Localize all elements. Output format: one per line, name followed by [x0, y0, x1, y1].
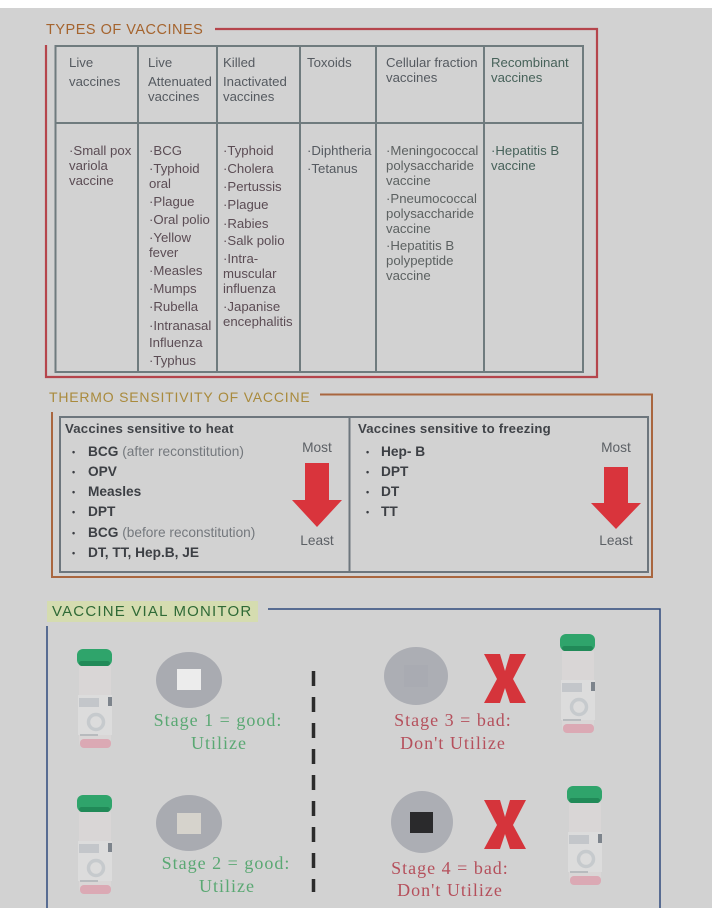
- label: stage 4: Don't Utilize: [397, 880, 503, 900]
- column: live attenuated vaccines: ·Rubella: [149, 299, 199, 314]
- stage 1: [77, 649, 282, 753]
- column: killed inactivated vaccines: ·Plague: [223, 197, 268, 212]
- column: killed inactivated vaccines: Inactivated: [223, 74, 287, 89]
- label: stage 2: [162, 853, 290, 896]
- column: live vaccines: variola: [69, 158, 109, 173]
- column: sensitive to heat: •: [72, 487, 75, 497]
- column: sensitive to heat: •: [72, 467, 75, 477]
- panel: thermo sensitivity table: [60, 417, 648, 572]
- column: killed inactivated vaccines: ·Cholera: [223, 161, 274, 176]
- column: toxoids: ·Diphtheria: [307, 143, 372, 158]
- indicator: stage 1: [156, 652, 222, 708]
- column: toxoids: Toxoids: [307, 55, 352, 70]
- column: sensitive to heat: BCG (after reconstitution): [88, 444, 244, 459]
- column: sensitive to heat: Most: [302, 440, 332, 455]
- label: stage 3: Don't Utilize: [400, 733, 506, 753]
- label: stage 2: Stage 2 = good:: [162, 853, 290, 873]
- column: live attenuated vaccines: ·Measles: [149, 263, 203, 278]
- column: sensitive to heat: DPT: [88, 504, 116, 519]
- column: live attenuated vaccines: ·Intranasal: [149, 318, 211, 333]
- column: live attenuated vaccines: Influenza: [149, 335, 203, 350]
- arrow: freezing most to least: [591, 467, 641, 529]
- column: killed inactivated vaccines: ·Typhoid: [223, 143, 274, 158]
- column: sensitive to freezing: Least: [599, 533, 633, 548]
- column: killed inactivated vaccines: ·Salk polio: [223, 233, 285, 248]
- stage 3: [384, 634, 595, 753]
- column: recombinant vaccines: vaccine: [491, 158, 536, 173]
- column: recombinant vaccines: Recombinant: [491, 55, 569, 70]
- column: live attenuated vaccines: ·Mumps: [149, 281, 197, 296]
- column: live vaccines: vaccines: [69, 74, 121, 89]
- column: sensitive to freezing: DPT: [381, 464, 409, 479]
- column: live vaccines: vaccine: [69, 173, 114, 188]
- column: live attenuated vaccines: ·Plague: [149, 194, 194, 209]
- divider: dashed line: [312, 671, 315, 892]
- column: killed inactivated vaccines: ·Japanise: [223, 299, 280, 314]
- column: sensitive to heat: •: [72, 548, 75, 558]
- heading: types of vaccines: TYPES OF VACCINES: [46, 22, 203, 38]
- stage 2: [77, 795, 290, 896]
- column: sensitive to heat: •: [72, 447, 75, 457]
- column: cellular fraction vaccines: polypeptide: [386, 253, 453, 268]
- column: live vaccines: [69, 55, 132, 188]
- column: sensitive to freezing: TT: [381, 504, 398, 519]
- column: sensitive to freezing: •: [366, 447, 369, 457]
- column: sensitive to heat: DT, TT, Hep.B, JE: [88, 545, 199, 560]
- column: cellular fraction vaccines: [386, 55, 478, 283]
- table grid: [55, 46, 583, 372]
- column: recombinant vaccines: ·Hepatitis B: [491, 143, 559, 158]
- column: live vaccines: ·Small pox: [69, 143, 132, 158]
- column: live attenuated vaccines: Live: [148, 55, 172, 70]
- column: cellular fraction vaccines: vaccine: [386, 268, 431, 283]
- heading: thermo sensitivity of vaccine: THERMO SENSITIVITY OF VACCINE: [49, 389, 310, 405]
- column: killed inactivated vaccines: Killed: [223, 55, 255, 70]
- column: live attenuated vaccines: ·Oral polio: [149, 212, 210, 227]
- indicator: stage 4: [391, 791, 453, 853]
- column: killed inactivated vaccines: ·Pertussis: [223, 179, 282, 194]
- column: killed inactivated vaccines: vaccines: [223, 89, 275, 104]
- panel frame: vaccine vial monitor: [47, 609, 660, 908]
- icon: red X stage 3: [484, 654, 526, 703]
- vial: stage 2: [77, 795, 112, 894]
- label: stage 3: Stage 3 = bad:: [394, 710, 512, 730]
- column: live attenuated vaccines: fever: [149, 245, 179, 260]
- column: sensitive to heat: Vaccines sensitive to heat: [65, 421, 234, 436]
- column: killed inactivated vaccines: influenza: [223, 281, 276, 296]
- table outline: [60, 417, 648, 572]
- column: toxoids: ·Tetanus: [307, 161, 358, 176]
- column: cellular fraction vaccines: vaccine: [386, 221, 431, 236]
- panel frame: thermo sensitivity: [52, 394, 652, 577]
- column: cellular fraction vaccines: polysaccharide: [386, 206, 474, 221]
- column: sensitive to heat: •: [72, 528, 75, 538]
- column: sensitive to freezing: •: [366, 487, 369, 497]
- arrow: heat most to least: [292, 463, 342, 527]
- label: stage 2: Utilize: [199, 876, 255, 896]
- label: stage 1: Stage 1 = good:: [154, 710, 282, 730]
- label: stage 1: [154, 710, 282, 753]
- column: live attenuated vaccines: [148, 55, 212, 368]
- indicator: stage 3: [384, 647, 448, 705]
- column: cellular fraction vaccines: Cellular fraction: [386, 55, 478, 70]
- column: sensitive to heat: •: [72, 507, 75, 517]
- column: sensitive to heat: Measles: [88, 484, 142, 499]
- column: sensitive to freezing: Hep- B: [381, 444, 425, 459]
- column: killed inactivated vaccines: [223, 55, 293, 329]
- column: sensitive to freezing: Vaccines sensitive to freezing: [358, 421, 551, 436]
- vial: stage 3: [560, 634, 595, 733]
- column: sensitive to heat: OPV: [88, 464, 118, 479]
- column: live attenuated vaccines: oral: [149, 176, 171, 191]
- column: recombinant vaccines: [491, 55, 569, 173]
- label: stage 1: Utilize: [191, 733, 247, 753]
- panel frame: types of vaccines: [46, 29, 597, 377]
- column: sensitive to freezing: [358, 421, 633, 548]
- column: cellular fraction vaccines: polysaccharide: [386, 158, 474, 173]
- column: cellular fraction vaccines: vaccine: [386, 173, 431, 188]
- vial: stage 1: [77, 649, 112, 748]
- stage 4: [391, 786, 602, 900]
- column: live attenuated vaccines: ·Yellow: [149, 230, 192, 245]
- column: live attenuated vaccines: Attenuated: [148, 74, 212, 89]
- label: stage 4: [391, 858, 509, 900]
- column: live vaccines: Live: [69, 55, 93, 70]
- column: cellular fraction vaccines: ·Meningococcal: [386, 143, 478, 158]
- column: live attenuated vaccines: vaccines: [148, 89, 200, 104]
- column: sensitive to heat: [65, 421, 334, 560]
- label: stage 4: Stage 4 = bad:: [391, 858, 509, 878]
- column: toxoids: [307, 55, 372, 176]
- label: stage 3: [394, 710, 512, 753]
- indicator: stage 2: [156, 795, 222, 851]
- column: sensitive to heat: BCG (before reconstitution): [88, 525, 255, 540]
- column: killed inactivated vaccines: muscular: [223, 266, 277, 281]
- panel: types of vaccines table: [55, 46, 583, 372]
- column: sensitive to freezing: •: [366, 507, 369, 517]
- icon: red X stage 4: [484, 800, 526, 849]
- column: sensitive to freezing: •: [366, 467, 369, 477]
- column: cellular fraction vaccines: ·Pneumococcal: [386, 191, 477, 206]
- column: sensitive to freezing: DT: [381, 484, 400, 499]
- column: cellular fraction vaccines: ·Hepatitis B: [386, 238, 454, 253]
- column: killed inactivated vaccines: ·Intra-: [223, 251, 258, 266]
- column: recombinant vaccines: vaccines: [491, 70, 543, 85]
- heading highlight and title: vaccine vial monitor: VACCINE VIAL MONITOR: [52, 603, 252, 620]
- column: sensitive to heat: Least: [300, 533, 334, 548]
- vial: stage 4: [567, 786, 602, 885]
- column: cellular fraction vaccines: vaccines: [386, 70, 438, 85]
- column: sensitive to freezing: Most: [601, 440, 631, 455]
- column: killed inactivated vaccines: ·Rabies: [223, 216, 269, 231]
- column: live attenuated vaccines: ·Typhus: [149, 353, 196, 368]
- column: live attenuated vaccines: ·Typhoid: [149, 161, 200, 176]
- column: live attenuated vaccines: ·BCG: [149, 143, 182, 158]
- column: killed inactivated vaccines: encephalitis: [223, 314, 293, 329]
